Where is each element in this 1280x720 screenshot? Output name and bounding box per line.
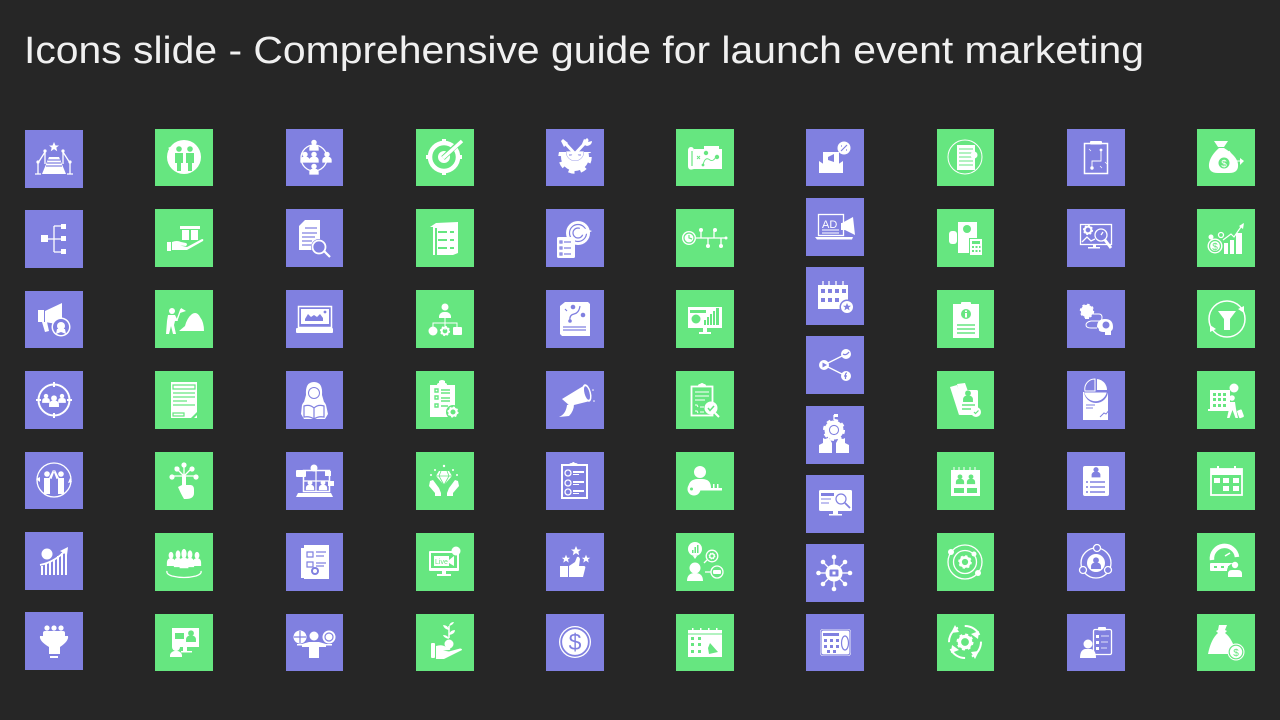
icon: document — [155, 371, 213, 429]
icon: ID cards verified — [937, 371, 994, 429]
icon: monitor analysis — [1067, 209, 1125, 267]
icon: diamond in hands — [416, 452, 474, 510]
icon: coins with growth chart: $ — [1212, 242, 1218, 253]
icon: strategy map — [676, 129, 734, 186]
icon: pie chart report — [1067, 371, 1125, 429]
icon: group of people — [155, 533, 213, 591]
icon: hand with money plant — [416, 614, 474, 671]
icon: AD on laptop with megaphone: AD — [822, 219, 837, 231]
icon: clipboard checklist with gear — [416, 371, 474, 429]
icon: gauge with person — [1197, 533, 1255, 591]
icon: network of people — [286, 129, 343, 186]
icon: hiker with flag and mountain — [155, 290, 213, 348]
icon: strategy document — [546, 290, 604, 348]
icon: clipboard info — [937, 290, 994, 348]
icon: money bag with arrows: $ — [1221, 159, 1227, 170]
title: Icons slide - Comprehensive guide for launch event marketing — [24, 30, 1144, 72]
icon: target with arrow — [416, 129, 474, 186]
icon: gear with cycle arrows — [937, 614, 994, 671]
icon: document stack with gear — [286, 533, 343, 591]
icon: resume document — [1067, 452, 1125, 510]
icon: clipboard checklist — [546, 452, 604, 510]
icon: calendar with star — [806, 267, 864, 325]
icon: person with orbit icons — [1067, 533, 1125, 591]
icon: person with speech circles — [676, 533, 734, 591]
icon: hand holding box — [155, 209, 213, 267]
icon: woman reading — [286, 371, 343, 429]
icon: idea to brain — [1067, 290, 1125, 348]
icon: clipboard flow plan — [1067, 129, 1125, 186]
icon: stacked checklists — [416, 209, 474, 267]
icon: live video monitor: Live — [435, 559, 448, 566]
icon: calendar with marker — [676, 614, 734, 671]
icon: keypad with fingerprint — [806, 614, 864, 671]
icon: funnel with cycle — [1197, 290, 1255, 348]
icon: monitor search — [806, 475, 864, 533]
icon: money sack with coin — [1197, 614, 1255, 671]
icon: megaphone with hand — [546, 371, 604, 429]
icon: coins with growth chart — [1197, 209, 1255, 267]
icon: org chart with person — [416, 290, 474, 348]
icon: two people in circle — [155, 129, 213, 186]
icon: connection hub — [806, 544, 864, 602]
icon: gear with wrench — [546, 129, 604, 186]
icon: target with checklist — [546, 209, 604, 267]
icon: dollar coin — [546, 614, 604, 671]
icon: building with traveller — [1197, 371, 1255, 429]
icon: person with clipboard — [1067, 614, 1125, 671]
icon: calendar with people — [937, 452, 994, 510]
icon: money sack with coin: $ — [1233, 648, 1239, 659]
icon: money bag with arrows — [1197, 129, 1255, 186]
icon: document in cycle — [937, 129, 994, 186]
icon: clipboard review — [676, 371, 734, 429]
icon: laptop analytics — [286, 290, 343, 348]
icon: orbit with gear — [937, 533, 994, 591]
icon: calendar schedule — [1197, 452, 1255, 510]
icon: thumbs up with stars — [546, 533, 604, 591]
icon: high five cycle — [25, 452, 83, 509]
icon: hierarchy tree — [25, 210, 83, 268]
icon: dollar coin: $ — [569, 629, 582, 655]
icon: social share — [806, 336, 864, 394]
icon: document search — [286, 209, 343, 267]
icon: timeline with clock — [676, 209, 734, 267]
icon: megaphone with badge — [25, 291, 83, 348]
icon: growth chart with coin — [25, 532, 83, 590]
icon: email offer — [806, 129, 864, 186]
icon: financial document with calculator — [937, 209, 994, 267]
icon: monitor with charts — [676, 290, 734, 348]
icon: person with key — [676, 452, 734, 510]
icon: hands with gear — [806, 406, 864, 464]
icon: live video monitor — [416, 533, 474, 591]
icon: people funnel — [25, 612, 83, 670]
icon: online presenter — [155, 614, 213, 671]
icon: target audience — [25, 371, 83, 429]
icon: AD on laptop with megaphone — [806, 198, 864, 256]
icon: person balancing options — [286, 614, 343, 671]
icon: video conference laptop — [286, 452, 343, 510]
icon: touch hub — [155, 452, 213, 510]
icon: red carpet — [25, 130, 83, 188]
